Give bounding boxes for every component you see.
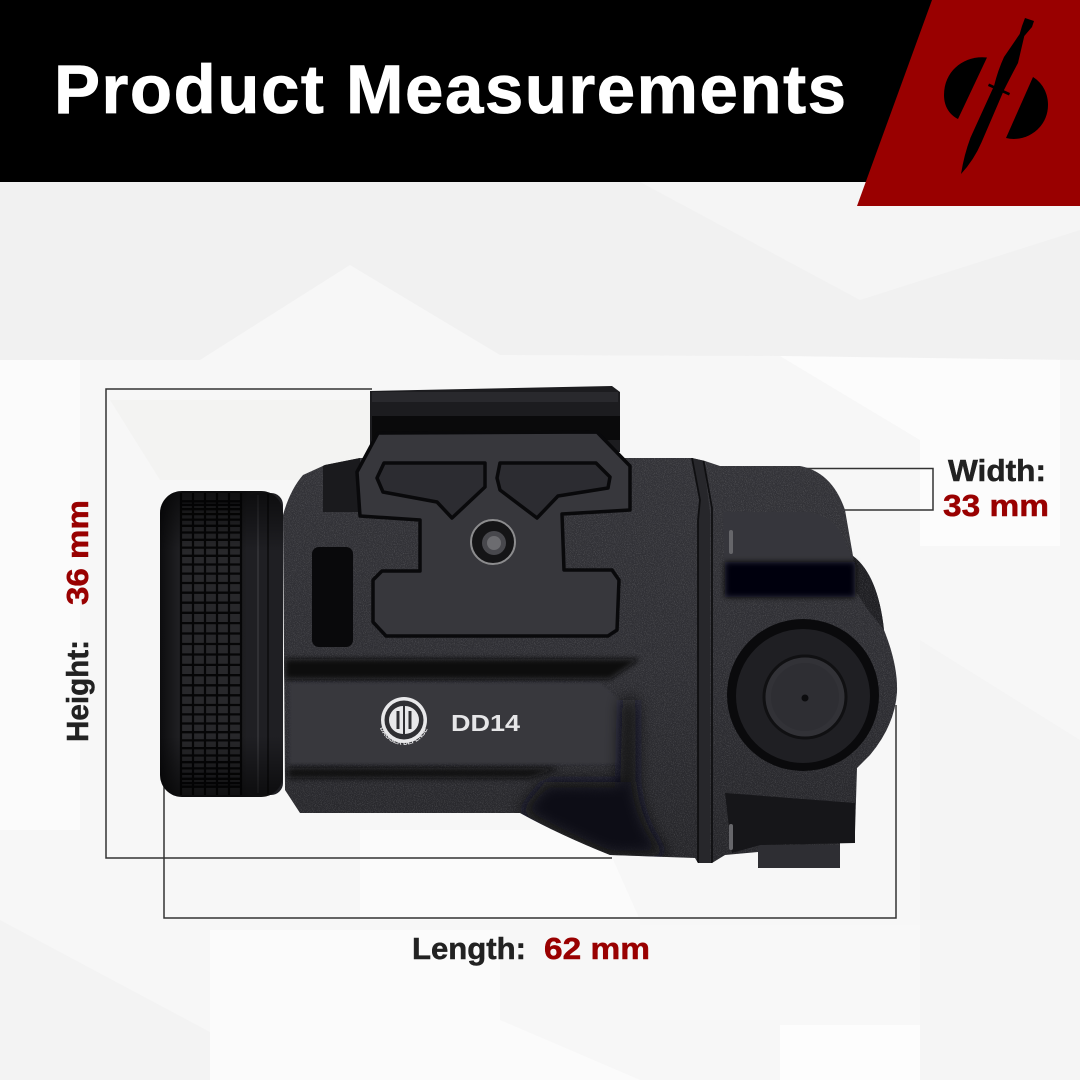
lower panel shadow xyxy=(520,700,668,856)
lens bezel xyxy=(160,491,283,797)
knurled grip xyxy=(181,493,242,795)
divider band xyxy=(692,458,710,865)
logo panel xyxy=(857,0,1080,206)
length label: 62 mm xyxy=(544,931,650,966)
rear lobe xyxy=(853,556,884,630)
height label: Height: xyxy=(60,640,95,742)
height label xyxy=(60,500,95,742)
side slot xyxy=(312,547,353,647)
upper rear recess shadow xyxy=(725,562,855,597)
width dimension line xyxy=(803,468,933,510)
lower panel xyxy=(290,683,620,764)
top rail xyxy=(370,386,620,452)
height label: 36 mm xyxy=(60,500,95,605)
screw xyxy=(470,519,516,565)
rear tab xyxy=(758,845,840,868)
lower rear block xyxy=(725,793,855,853)
width label: 33 mm xyxy=(943,488,1049,523)
length label: Length: xyxy=(412,931,526,966)
length dimension line xyxy=(164,705,896,918)
clamp recess right xyxy=(497,463,610,518)
icon: dagger logo xyxy=(944,18,1048,174)
header bar xyxy=(0,0,1080,182)
speckled texture xyxy=(280,432,900,872)
clamp recess left xyxy=(377,463,485,518)
brand emblem: DAGGER DEFENSE xyxy=(380,727,428,745)
housing body xyxy=(280,432,900,872)
width label xyxy=(943,453,1049,523)
flashlight product xyxy=(160,386,898,868)
width label: Width: xyxy=(948,453,1046,488)
clamp plate xyxy=(357,432,630,636)
brand emblem xyxy=(380,697,428,745)
title: Product Measurements xyxy=(54,51,846,128)
upper rear recess xyxy=(723,512,856,598)
length label xyxy=(412,931,650,966)
pressure switch xyxy=(727,619,879,771)
height dimension line xyxy=(106,389,612,858)
channel shadow xyxy=(285,659,640,679)
model label: DD14 xyxy=(451,710,520,736)
pins xyxy=(729,532,733,848)
upper left step xyxy=(323,458,360,512)
